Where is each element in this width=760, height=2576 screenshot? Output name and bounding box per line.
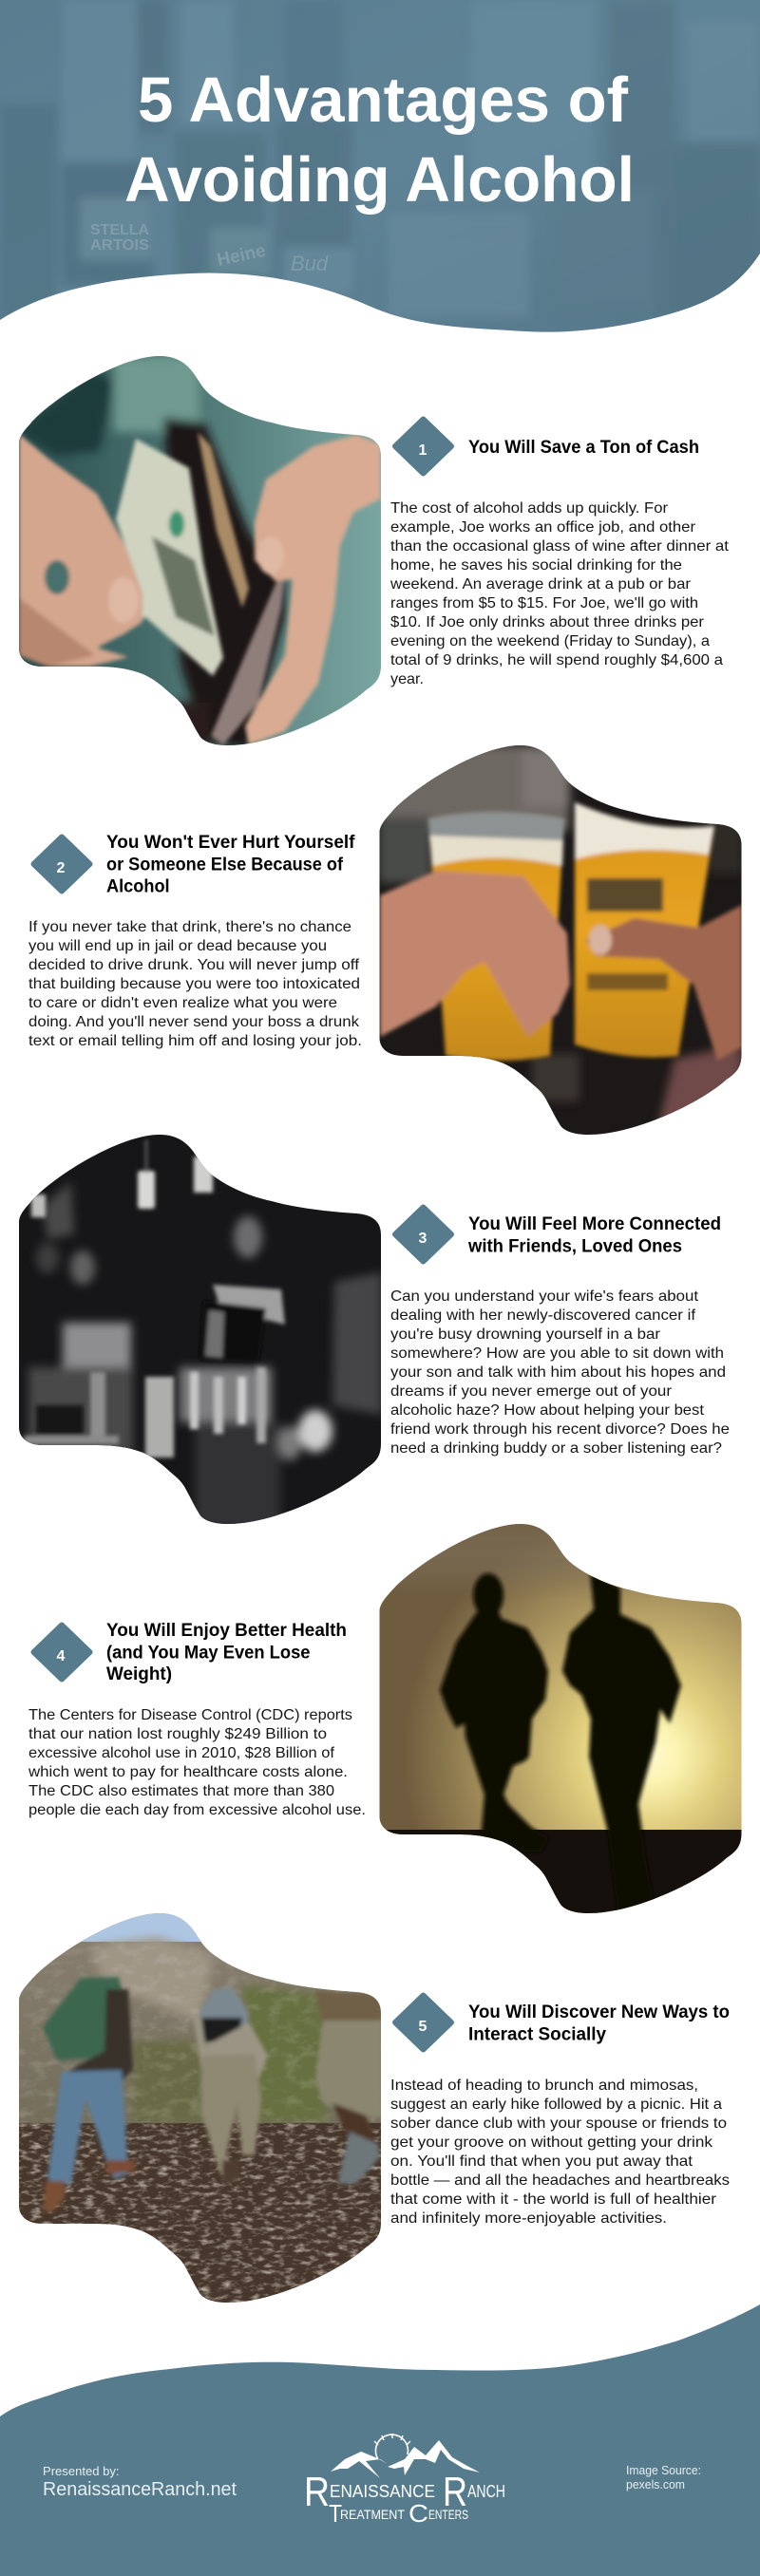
title: 5 Advantages of (138, 65, 629, 136)
logo wordmark: C (408, 2499, 428, 2528)
body 1: than the occasional glass of wine after dinner at (390, 538, 730, 555)
body 2: If you never take that drink, there's no chance (28, 919, 352, 935)
body 3: somewhere? How are you able to sit down with (390, 1345, 724, 1362)
photo: hikers on a mountain (19, 1913, 382, 2305)
image source credit: pexels.com (626, 2477, 685, 2491)
photo: beer glasses toast (379, 745, 742, 1137)
heading 4: (and You May Even Lose (106, 1643, 310, 1664)
heading 5: Interact Socially (468, 2024, 606, 2045)
bottle label text in photo: STELLA (90, 222, 149, 238)
bottle label text in photo: ARTOIS (90, 237, 149, 254)
body 3: alcoholic haze? How about helping your best (390, 1402, 705, 1419)
body 2: that building because you were too intoxicated (28, 976, 360, 992)
bottle label text in photo: Bud (291, 252, 329, 275)
body 4 (28, 1707, 366, 1818)
body 5: get your groove on without getting your drink (390, 2134, 712, 2151)
body 1: home, he saves his social drinking for the (390, 557, 682, 573)
body 5: Instead of heading to brunch and mimosas, (390, 2078, 698, 2094)
logo wordmark: R (304, 2469, 330, 2515)
logo: Renaissance Ranch Treatment Centers (304, 2434, 505, 2528)
body 4: which went to pay for healthcare costs alone. (28, 1764, 348, 1780)
heading 4: Weight) (106, 1664, 172, 1684)
body 3: Can you understand your wife's fears about (390, 1288, 699, 1305)
body 3 (390, 1288, 730, 1457)
body 1: total of 9 drinks, he will spend roughly $4,600 a (390, 652, 723, 668)
body 1: The cost of alcohol adds up quickly. For (390, 500, 668, 517)
body 2 (28, 919, 362, 1049)
body 1: year. (390, 671, 424, 687)
body 1: weekend. An average drink at a pub or bar (390, 576, 691, 592)
title: Avoiding Alcohol (124, 144, 635, 216)
heading 5: You Will Discover New Ways to (468, 2003, 730, 2022)
image source credit (626, 2463, 701, 2491)
badge 3: 3 (419, 1231, 428, 1247)
body 5 (390, 2078, 730, 2227)
body 3: dreams if you never emerge out of your (390, 1383, 672, 1400)
badge 3 (395, 1208, 451, 1261)
heading 3: You Will Feel More Connected (468, 1214, 721, 1234)
body 3: friend work through his recent divorce? Does he (390, 1421, 730, 1438)
step 1 (390, 420, 730, 687)
icon: sun and mountains (331, 2434, 480, 2478)
body 1: example, Joe works an office job, and other (390, 519, 695, 536)
badge 1: 1 (419, 442, 428, 459)
logo wordmark: R (443, 2469, 467, 2515)
body 5: sober dance club with your spouse or friends to (390, 2115, 727, 2132)
heading 3 (467, 1214, 721, 1257)
body 1: ranges from $5 to $15. For Joe, we'll go with (390, 595, 698, 611)
body 3: need a drinking buddy or a sober listening ear? (390, 1440, 722, 1457)
body 1 (390, 500, 730, 687)
logo wordmark: ENTERS (428, 2508, 468, 2522)
image source credit: Image Source: (626, 2463, 701, 2477)
heading 2: or Someone Else Because of (106, 855, 344, 875)
body 2: text or email telling him off and losing your job. (28, 1033, 362, 1049)
photo: two runners at sunset (379, 1524, 742, 1920)
body 5: on. You'll find that when you put away that (390, 2153, 694, 2170)
badge 2: 2 (57, 860, 66, 876)
title (124, 65, 635, 216)
heading 4: You Will Enjoy Better Health (106, 1621, 347, 1641)
heading 1: You Will Save a Ton of Cash (468, 438, 699, 458)
body 5: and infinitely more-enjoyable activities. (390, 2210, 667, 2227)
presented by credit: Presented by: (43, 2464, 120, 2478)
bottle label text in photo (91, 224, 329, 271)
heading 2: Alcohol (106, 877, 170, 896)
logo wordmark: ANCH (467, 2482, 505, 2501)
step 5 (390, 1996, 730, 2227)
badge 5: 5 (419, 2019, 428, 2035)
badge 5 (395, 1996, 451, 2049)
body 2: decided to drive drunk. You will never jump off (28, 957, 360, 973)
badge 4: 4 (57, 1648, 66, 1664)
logo wordmark (304, 2469, 505, 2528)
heading 3: with Friends, Loved Ones (467, 1236, 682, 1257)
body 3: you're busy drowning yourself in a bar (390, 1326, 660, 1343)
heading 4 (106, 1621, 347, 1684)
body 2: to care or didn't even realize what you were (28, 995, 337, 1011)
header banner with bottle photo (0, 0, 760, 342)
step 3 (390, 1208, 730, 1457)
body 5: that come with it - the world is full of healthier (390, 2191, 716, 2208)
body 4: The CDC also estimates that more than 380 (28, 1783, 334, 1799)
footer wave panel (0, 2304, 760, 2576)
presented by credit (43, 2464, 237, 2500)
body 2: doing. And you'll never send your boss a drunk (28, 1014, 359, 1030)
body 3: dealing with her newly-discovered cancer if (390, 1307, 696, 1324)
body 5: bottle — and all the headaches and heartbreaks (390, 2172, 730, 2189)
logo wordmark: T (329, 2499, 342, 2528)
badge 2 (34, 837, 89, 891)
body 2: you will end up in jail or dead because you (28, 938, 327, 954)
step 4 (28, 1621, 366, 1818)
body 1: evening on the weekend (Friday to Sunday), a (390, 633, 710, 649)
photo: hands opening wallet (19, 356, 382, 750)
badge 1 (395, 420, 451, 473)
body 5: suggest an early hike followed by a picnic. Hit a (390, 2097, 722, 2113)
body 4: that our nation lost roughly $249 Billion to (28, 1726, 327, 1742)
body 1: $10. If Joe only drinks about three drinks per (390, 614, 704, 630)
heading 2: You Won't Ever Hurt Yourself (106, 833, 355, 853)
heading 2 (106, 833, 355, 896)
logo wordmark: ENAISSANCE (330, 2482, 435, 2501)
body 4: people die each day from excessive alcohol use. (28, 1802, 366, 1818)
bottle label text in photo: Heine (216, 241, 268, 271)
body 3: your son and talk with him about his hopes and (390, 1364, 726, 1381)
badge 4 (34, 1626, 89, 1679)
logo wordmark: REATMENT (340, 2508, 405, 2522)
step 2 (28, 833, 362, 1049)
heading 5 (468, 2003, 730, 2045)
presented by credit: RenaissanceRanch.net (43, 2479, 237, 2500)
body 4: The Centers for Disease Control (CDC) reports (28, 1707, 352, 1723)
photo: crowded bar in black and white (19, 1135, 382, 1529)
body 4: excessive alcohol use in 2010, $28 Billion of (28, 1745, 335, 1761)
